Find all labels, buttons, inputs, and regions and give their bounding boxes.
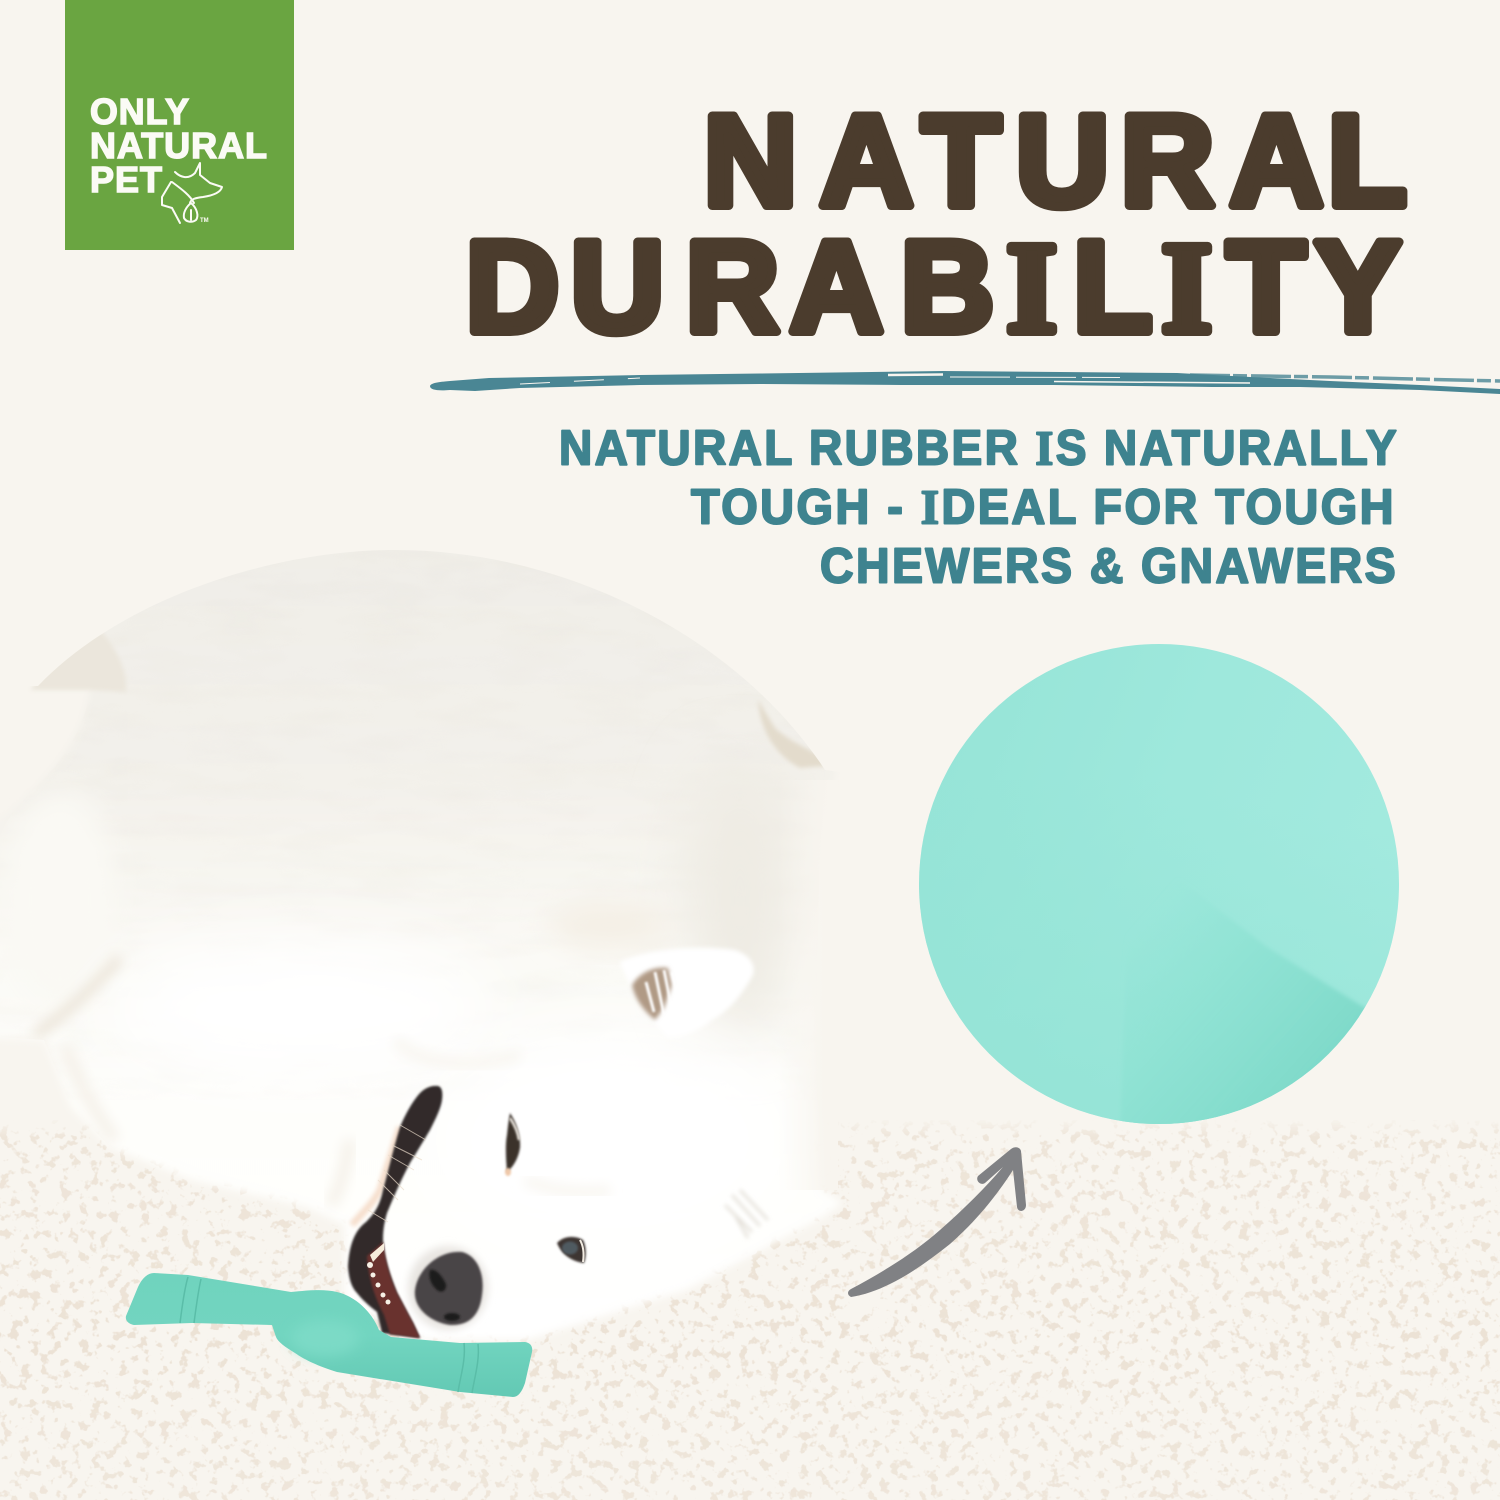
dog nose [408, 1246, 488, 1330]
subheading: TOUGH - IDEAL FOR TOUGH [691, 480, 1396, 534]
fur corner top left [32, 634, 126, 691]
dog eyes [505, 1113, 586, 1263]
dog ear [620, 948, 754, 1037]
fur corner top right [758, 704, 823, 769]
second ear fur [725, 1190, 768, 1238]
subheading [559, 420, 1399, 594]
title: NATURAL [704, 88, 1407, 234]
speckled floor texture [0, 1120, 1500, 1500]
icon: dog and cat outline with leaf [162, 163, 222, 223]
dog photo: white samoyed chewing toy [0, 500, 1420, 1397]
logo: Only Natural Pet [65, 0, 294, 250]
subheading: CHEWERS & GNAWERS [820, 540, 1398, 594]
logo: Only Natural Pet: NATURAL [90, 125, 268, 166]
logo: Only Natural Pet: PET [90, 159, 163, 200]
subheading: NATURAL RUBBER IS NATURALLY [559, 420, 1399, 476]
arrow pointing to swatch [848, 1147, 1026, 1297]
chew toy [126, 1273, 532, 1397]
logo: Only Natural Pet: TM [200, 218, 209, 224]
dog body fur [0, 500, 860, 1340]
brush stroke divider [430, 371, 1500, 394]
dog mouth [348, 1086, 442, 1338]
teal material swatch circle [919, 644, 1420, 1130]
title: DURABILITY [466, 214, 1401, 360]
title [466, 88, 1407, 360]
soft right fur edge [809, 1108, 838, 1190]
logo: Only Natural Pet: ONLY [90, 91, 190, 132]
